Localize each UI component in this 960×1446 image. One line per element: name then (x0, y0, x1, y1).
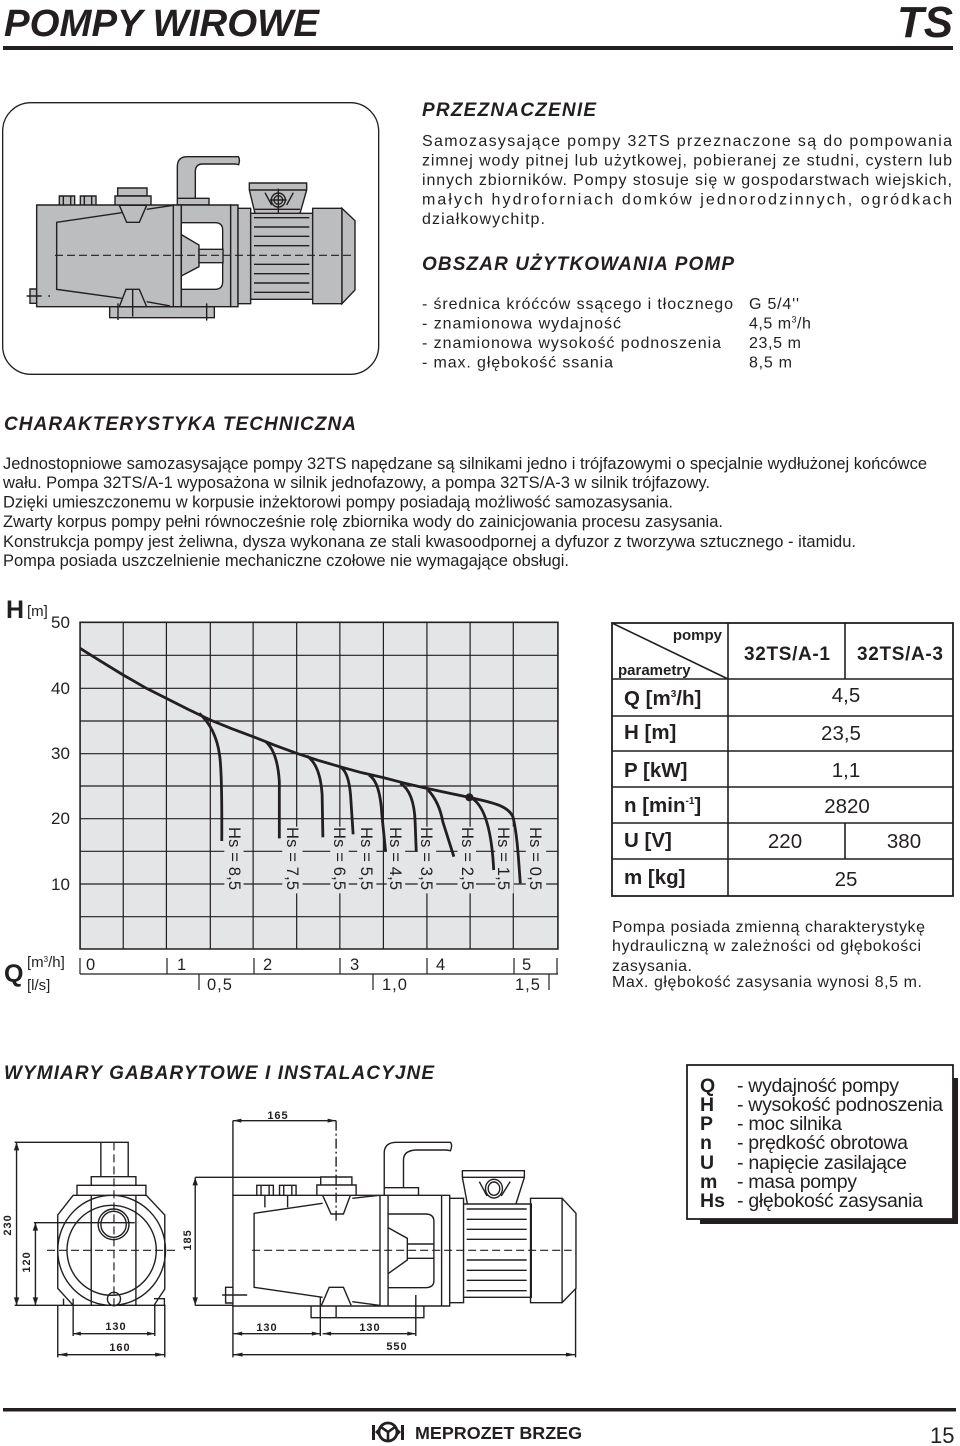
flow axis: 1 (177, 956, 186, 974)
technical description: Zwarty korpus pompy pełni równocześnie rolę zbiornika wody do zainicjowania procesu zasysania. (3, 513, 723, 531)
y axis labels: [m] (27, 603, 48, 620)
flow axis (4, 954, 558, 994)
y axis labels (6, 596, 70, 894)
legend box: - głębokość zasysania (737, 1190, 923, 1212)
table note (612, 919, 925, 991)
table header (618, 627, 943, 679)
section: przeznaczenie (422, 100, 952, 228)
description text: działkowychitp. (422, 211, 545, 228)
technical description: Pompa posiada uszczelnienie mechaniczne czołowe nie wymagające obsługi. (3, 552, 569, 570)
suction depth labels: Hs = 4,5 (386, 827, 404, 890)
parameters table (612, 623, 953, 896)
dimension drawing: side view (182, 1110, 576, 1357)
technical description: Dzięki umieszczonemu w korpusie inżektorowi pompy posiadają możliwość samozasysania. (3, 494, 673, 512)
side dimension values: 130 (359, 1322, 381, 1334)
main pump curve (80, 648, 520, 883)
table header: pompy (673, 627, 723, 644)
flow axis: 0 (86, 956, 95, 974)
description text: małych hydroforniach domków jednorodzinnych, ogródkach (422, 192, 952, 208)
front dimension values: 130 (105, 1321, 127, 1333)
y axis labels: 20 (51, 809, 70, 828)
flow axis: Q (4, 960, 23, 988)
row labels: n [min (624, 794, 686, 817)
suction depth labels: Hs = 7,5 (283, 827, 301, 890)
suction depth curves (199, 713, 494, 870)
flow axis: 1,5 (515, 976, 541, 994)
suction depth labels: Hs = 3,5 (417, 827, 435, 890)
row values: 23,5 (821, 722, 861, 745)
parameter list (422, 296, 811, 372)
heading: CHARAKTERYSTYKA TECHNICZNA (4, 414, 356, 435)
parameter list: G 5/4'' (749, 296, 799, 313)
plot grid and curves (80, 622, 558, 949)
description text (422, 133, 952, 228)
row values: 1,1 (832, 759, 860, 782)
y axis labels: 10 (51, 875, 70, 894)
suction depth labels: Hs = 5,5 (357, 827, 375, 890)
row labels: ] (694, 794, 701, 817)
front dimension values (2, 1214, 131, 1354)
suction depth labels: Hs = 8,5 (225, 827, 243, 890)
description text: innych zbiorników. Pompy stosuje się w gospodarstwach wiejskich, (422, 172, 952, 189)
legend box: n (700, 1132, 712, 1154)
side dimension values: 550 (386, 1341, 408, 1353)
y axis labels: H (6, 596, 24, 624)
flow axis: 2 (263, 956, 272, 974)
row labels: m [kg] (624, 866, 686, 889)
technical description: Konstrukcja pompy jest żeliwna, dysza wykonana ze stali kwasoodpornej a dyfuzor z tworzywa sztucznego - itamidu. (3, 533, 856, 551)
y axis labels: 50 (51, 613, 70, 632)
table note: zasysania. (612, 958, 692, 975)
row labels: P [kW] (624, 759, 687, 782)
table note: Max. głębokość zasysania wynosi 8,5 m. (612, 974, 922, 991)
dimension drawing: front view (2, 1142, 175, 1357)
illustration: pump in rounded frame (3, 103, 379, 374)
row labels (624, 687, 701, 889)
heading: PRZEZNACZENIE (422, 100, 597, 121)
row values: 2820 (824, 795, 870, 818)
legend box: - masa pompy (737, 1171, 857, 1193)
side dimension values: 165 (267, 1110, 289, 1122)
parameter list: - średnica króćców ssącego i tłocznego (422, 296, 733, 313)
flow axis: 1,0 (382, 976, 408, 994)
heading: OBSZAR UŻYTKOWANIA POMP (422, 254, 734, 275)
technical description (2, 455, 927, 570)
row labels: 3 (671, 689, 677, 700)
legend box: - prędkość obrotowa (737, 1132, 908, 1154)
side dimension values (182, 1110, 408, 1353)
parameter list: 4,5 m (749, 316, 792, 332)
legend box: - wydajność pompy (737, 1075, 899, 1097)
legend box (687, 1065, 958, 1224)
section: obszar uzytkowania (422, 254, 811, 372)
description text: Samozasysające pompy 32TS przeznaczone są do pompowania (422, 133, 952, 150)
row labels: Q [m (624, 687, 671, 710)
table header: 32TS/A-3 (857, 644, 943, 665)
table header: 32TS/A-1 (744, 644, 830, 665)
row values: 4,5 (832, 684, 860, 707)
flow axis: 0,5 (207, 976, 233, 994)
parameter list: 8,5 m (749, 354, 792, 372)
suction depth labels: Hs = 6,5 (330, 827, 348, 890)
parameter list: 3 (792, 314, 797, 324)
flow axis: [m (27, 954, 44, 971)
header (3, 0, 953, 50)
row values (768, 684, 921, 891)
row values: 220 (768, 830, 802, 853)
technical description: Jednostopniowe samozasysające pompy 32TS napędzane są silnikami jedno i trójfazowymi o specjalnie wydłużonej końcówce (3, 455, 927, 473)
row values: 25 (835, 868, 857, 891)
table header: parametry (618, 662, 691, 679)
legend box: - napięcie zasilające (737, 1152, 907, 1174)
legend box: H (700, 1094, 714, 1116)
suction depth labels: Hs = 1,5 (494, 827, 512, 890)
icon: company logo (372, 1423, 404, 1441)
row labels: /h] (676, 687, 701, 710)
flow axis: [l/s] (27, 977, 50, 994)
flow axis: /h] (48, 954, 65, 971)
legend box: m (700, 1171, 717, 1193)
technical description: wału. Pompa 32TS/A-1 wyposażona w silnik jednofazowy, a pompa 32TS/A-3 w silnik trójfazowy. (2, 474, 710, 492)
duty point (465, 793, 473, 801)
parameter list: - max. głębokość ssania (422, 354, 613, 372)
company name: MEPROZET BRZEG (415, 1423, 582, 1443)
legend box: P (700, 1113, 713, 1135)
dimensions heading: WYMIARY GABARYTOWE I INSTALACYJNE (4, 1063, 435, 1084)
legend box: - wysokość podnoszenia (737, 1094, 943, 1116)
description text: zimnej wody pitnej lub użytkowej, pobieranej ze studni, cystern lub (422, 152, 952, 170)
legend box: U (700, 1152, 714, 1174)
legend box: Hs (700, 1190, 725, 1212)
parameter list: - znamionowa wydajność (422, 316, 621, 332)
table note: Pompa posiada zmienną charakterystykę (612, 919, 925, 936)
y axis labels: 40 (51, 679, 70, 698)
legend box: Q (700, 1075, 715, 1097)
parameter list: - znamionowa wysokość podnoszenia (422, 335, 721, 352)
suction depth labels: Hs = 0,5 (526, 827, 544, 890)
performance chart (4, 596, 558, 994)
flow axis: 5 (522, 956, 531, 974)
suction depth labels (225, 827, 544, 890)
flow axis: 4 (436, 956, 445, 974)
table note: hydrauliczną w zależności od głębokości (612, 938, 921, 955)
y axis labels: 30 (51, 744, 70, 763)
row labels: H [m] (624, 721, 676, 744)
header rule (3, 46, 953, 50)
title: POMPY WIROWE (4, 3, 321, 45)
front dimension values: 230 (2, 1214, 14, 1236)
flow axis: 3 (44, 955, 49, 964)
suction depth labels: Hs = 2,5 (458, 827, 476, 890)
row values: 380 (887, 830, 921, 853)
front dimension values: 120 (21, 1251, 33, 1273)
section: charakterystyka techniczna (2, 414, 927, 570)
row labels: -1 (686, 796, 695, 807)
legend box: - moc silnika (737, 1113, 842, 1135)
row labels: U [V] (624, 829, 672, 852)
parameter list: /h (797, 316, 811, 332)
front dimension values: 160 (109, 1342, 131, 1354)
side dimension values: 185 (182, 1229, 194, 1251)
parameter list: 23,5 m (749, 335, 801, 352)
side dimension values: 130 (256, 1322, 278, 1334)
flow axis: 3 (350, 956, 359, 974)
footer (3, 1408, 956, 1446)
